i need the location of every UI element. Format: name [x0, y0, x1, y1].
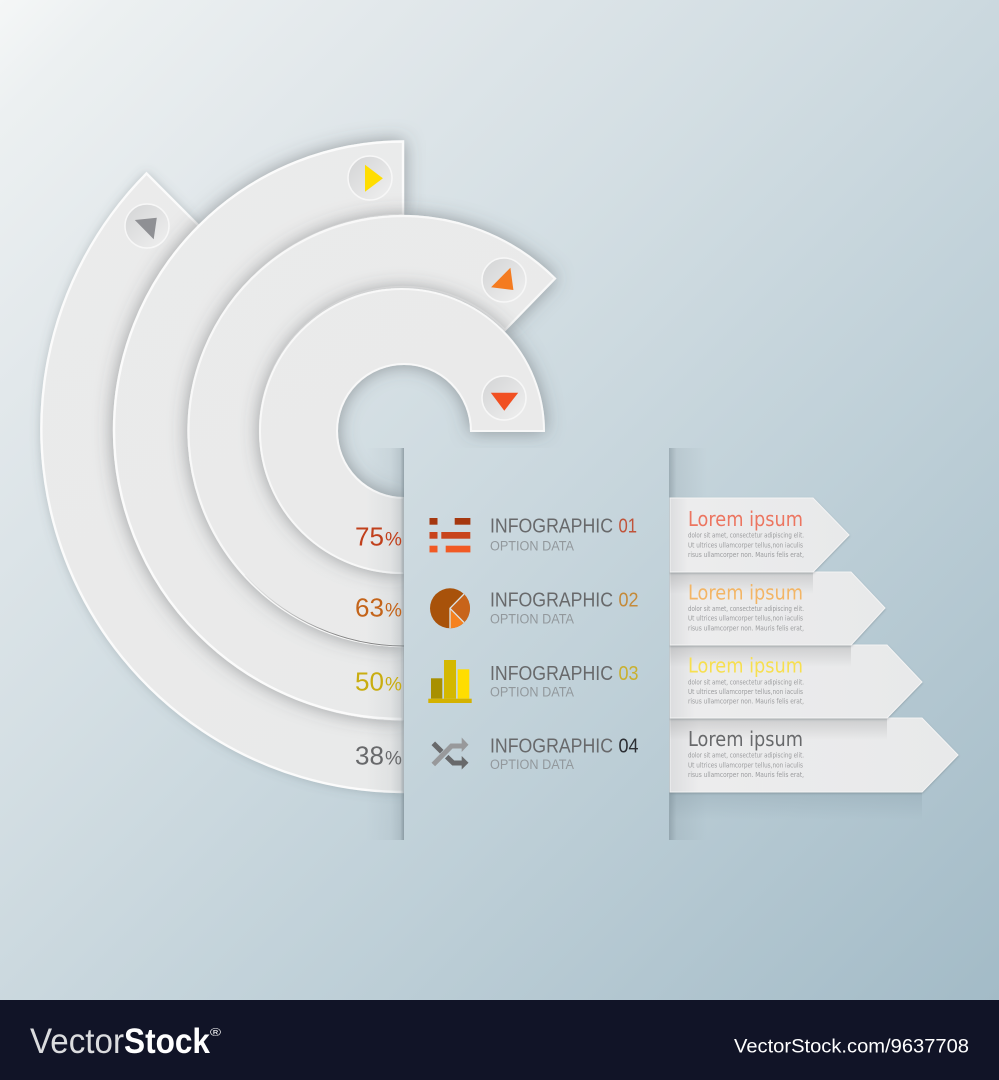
icon: pie chart: [430, 588, 470, 628]
button: orange triangle: [482, 258, 526, 302]
arrow 1 text: [688, 507, 804, 559]
row 1 heading: [490, 516, 637, 554]
footer bar: [0, 1000, 999, 1080]
label 38%: %: [385, 748, 402, 769]
label 50%: %: [385, 675, 402, 696]
arrow 1: [670, 498, 849, 572]
arrow 3 text: Lorem ipsum: [688, 654, 803, 678]
arrow 2 text: risus ullamcorper non. Mauris felis erat,: [688, 624, 804, 632]
row 4 heading: INFOGRAPHIC: [490, 735, 613, 757]
icon: bar chart: [428, 660, 472, 703]
row 3 heading: 03: [618, 663, 638, 685]
arrow 3 text: [688, 654, 804, 706]
arrow 4 text: Lorem ipsum: [688, 727, 803, 751]
button: red triangle: [482, 376, 526, 420]
arrow 1 text: dolor sit amet, consectetur adipiscing elit.: [688, 532, 804, 540]
row 4 heading: [490, 735, 638, 772]
icon: list bars: [430, 518, 470, 552]
arrow 2: [670, 572, 885, 645]
row 2 heading: [490, 590, 638, 626]
row 3 heading: [490, 663, 638, 699]
arrow 3: [670, 645, 922, 718]
arrow 1 text: Ut ultrices ullamcorper tellus,non iaculis: [688, 541, 803, 549]
panel left shadow: [366, 448, 404, 840]
label 75%: 75: [355, 522, 384, 552]
arrow 1 text: Lorem ipsum: [688, 507, 803, 531]
footer logo: Stock: [124, 1022, 210, 1061]
arrow 3 text: Ut ultrices ullamcorper tellus,non iaculis: [688, 688, 803, 696]
row 3 heading: OPTION DATA: [490, 684, 574, 699]
ring 63% arc: [188, 216, 555, 646]
row 2 heading: OPTION DATA: [490, 611, 574, 626]
footer logo: [30, 1022, 221, 1061]
footer url: VectorStock.com/9637708: [734, 1036, 969, 1058]
arrow 3 text: risus ullamcorper non. Mauris felis erat,: [688, 698, 804, 706]
label 63%: %: [385, 601, 402, 622]
footer logo: Vector: [30, 1022, 124, 1061]
arrow 4: [670, 718, 958, 792]
arrow 2 text: Ut ultrices ullamcorper tellus,non iaculis: [688, 615, 803, 623]
arrow 2 text: dolor sit amet, consectetur adipiscing elit.: [688, 605, 804, 613]
label 38%: 38: [355, 740, 384, 770]
row 1 heading: 01: [618, 516, 637, 538]
central panel: [404, 448, 669, 840]
row 4 heading: 04: [618, 735, 638, 757]
row 1 heading: INFOGRAPHIC: [490, 516, 613, 538]
row 4 heading: OPTION DATA: [490, 757, 574, 772]
row 1 heading: OPTION DATA: [490, 539, 574, 554]
percent labels: [355, 522, 402, 770]
row 3 heading: INFOGRAPHIC: [490, 663, 613, 685]
arrow 3 text: dolor sit amet, consectetur adipiscing elit.: [688, 678, 804, 686]
ring 63% bottom edge line: [245, 575, 404, 646]
shadow under arrow 4: [670, 792, 922, 820]
arrow 2 text: [688, 580, 804, 632]
ring 38% outer arc: [41, 174, 404, 792]
button: grey triangle: [125, 204, 169, 248]
row 2 heading: 02: [618, 590, 638, 612]
arrow 1 text: risus ullamcorper non. Mauris felis erat,: [688, 551, 804, 559]
arrow 4 text: dolor sit amet, consectetur adipiscing elit.: [688, 752, 804, 760]
icon: shuffle arrows: [433, 738, 468, 770]
arrow 2 text: Lorem ipsum: [688, 580, 803, 604]
label 50%: 50: [355, 667, 384, 697]
label 75%: %: [385, 530, 402, 551]
arrow 4 text: risus ullamcorper non. Mauris felis erat,: [688, 771, 804, 779]
button: yellow triangle: [348, 156, 392, 200]
row 2 heading: INFOGRAPHIC: [490, 590, 613, 612]
label 63%: 63: [355, 593, 384, 623]
arrow 4 text: Ut ultrices ullamcorper tellus,non iaculis: [688, 761, 803, 769]
ring 50% arc: [114, 142, 403, 719]
panel right shadow: [669, 448, 707, 840]
footer logo: ®: [210, 1027, 221, 1039]
ring 75% inner arc: [260, 289, 544, 573]
arrow 4 text: [688, 727, 804, 779]
